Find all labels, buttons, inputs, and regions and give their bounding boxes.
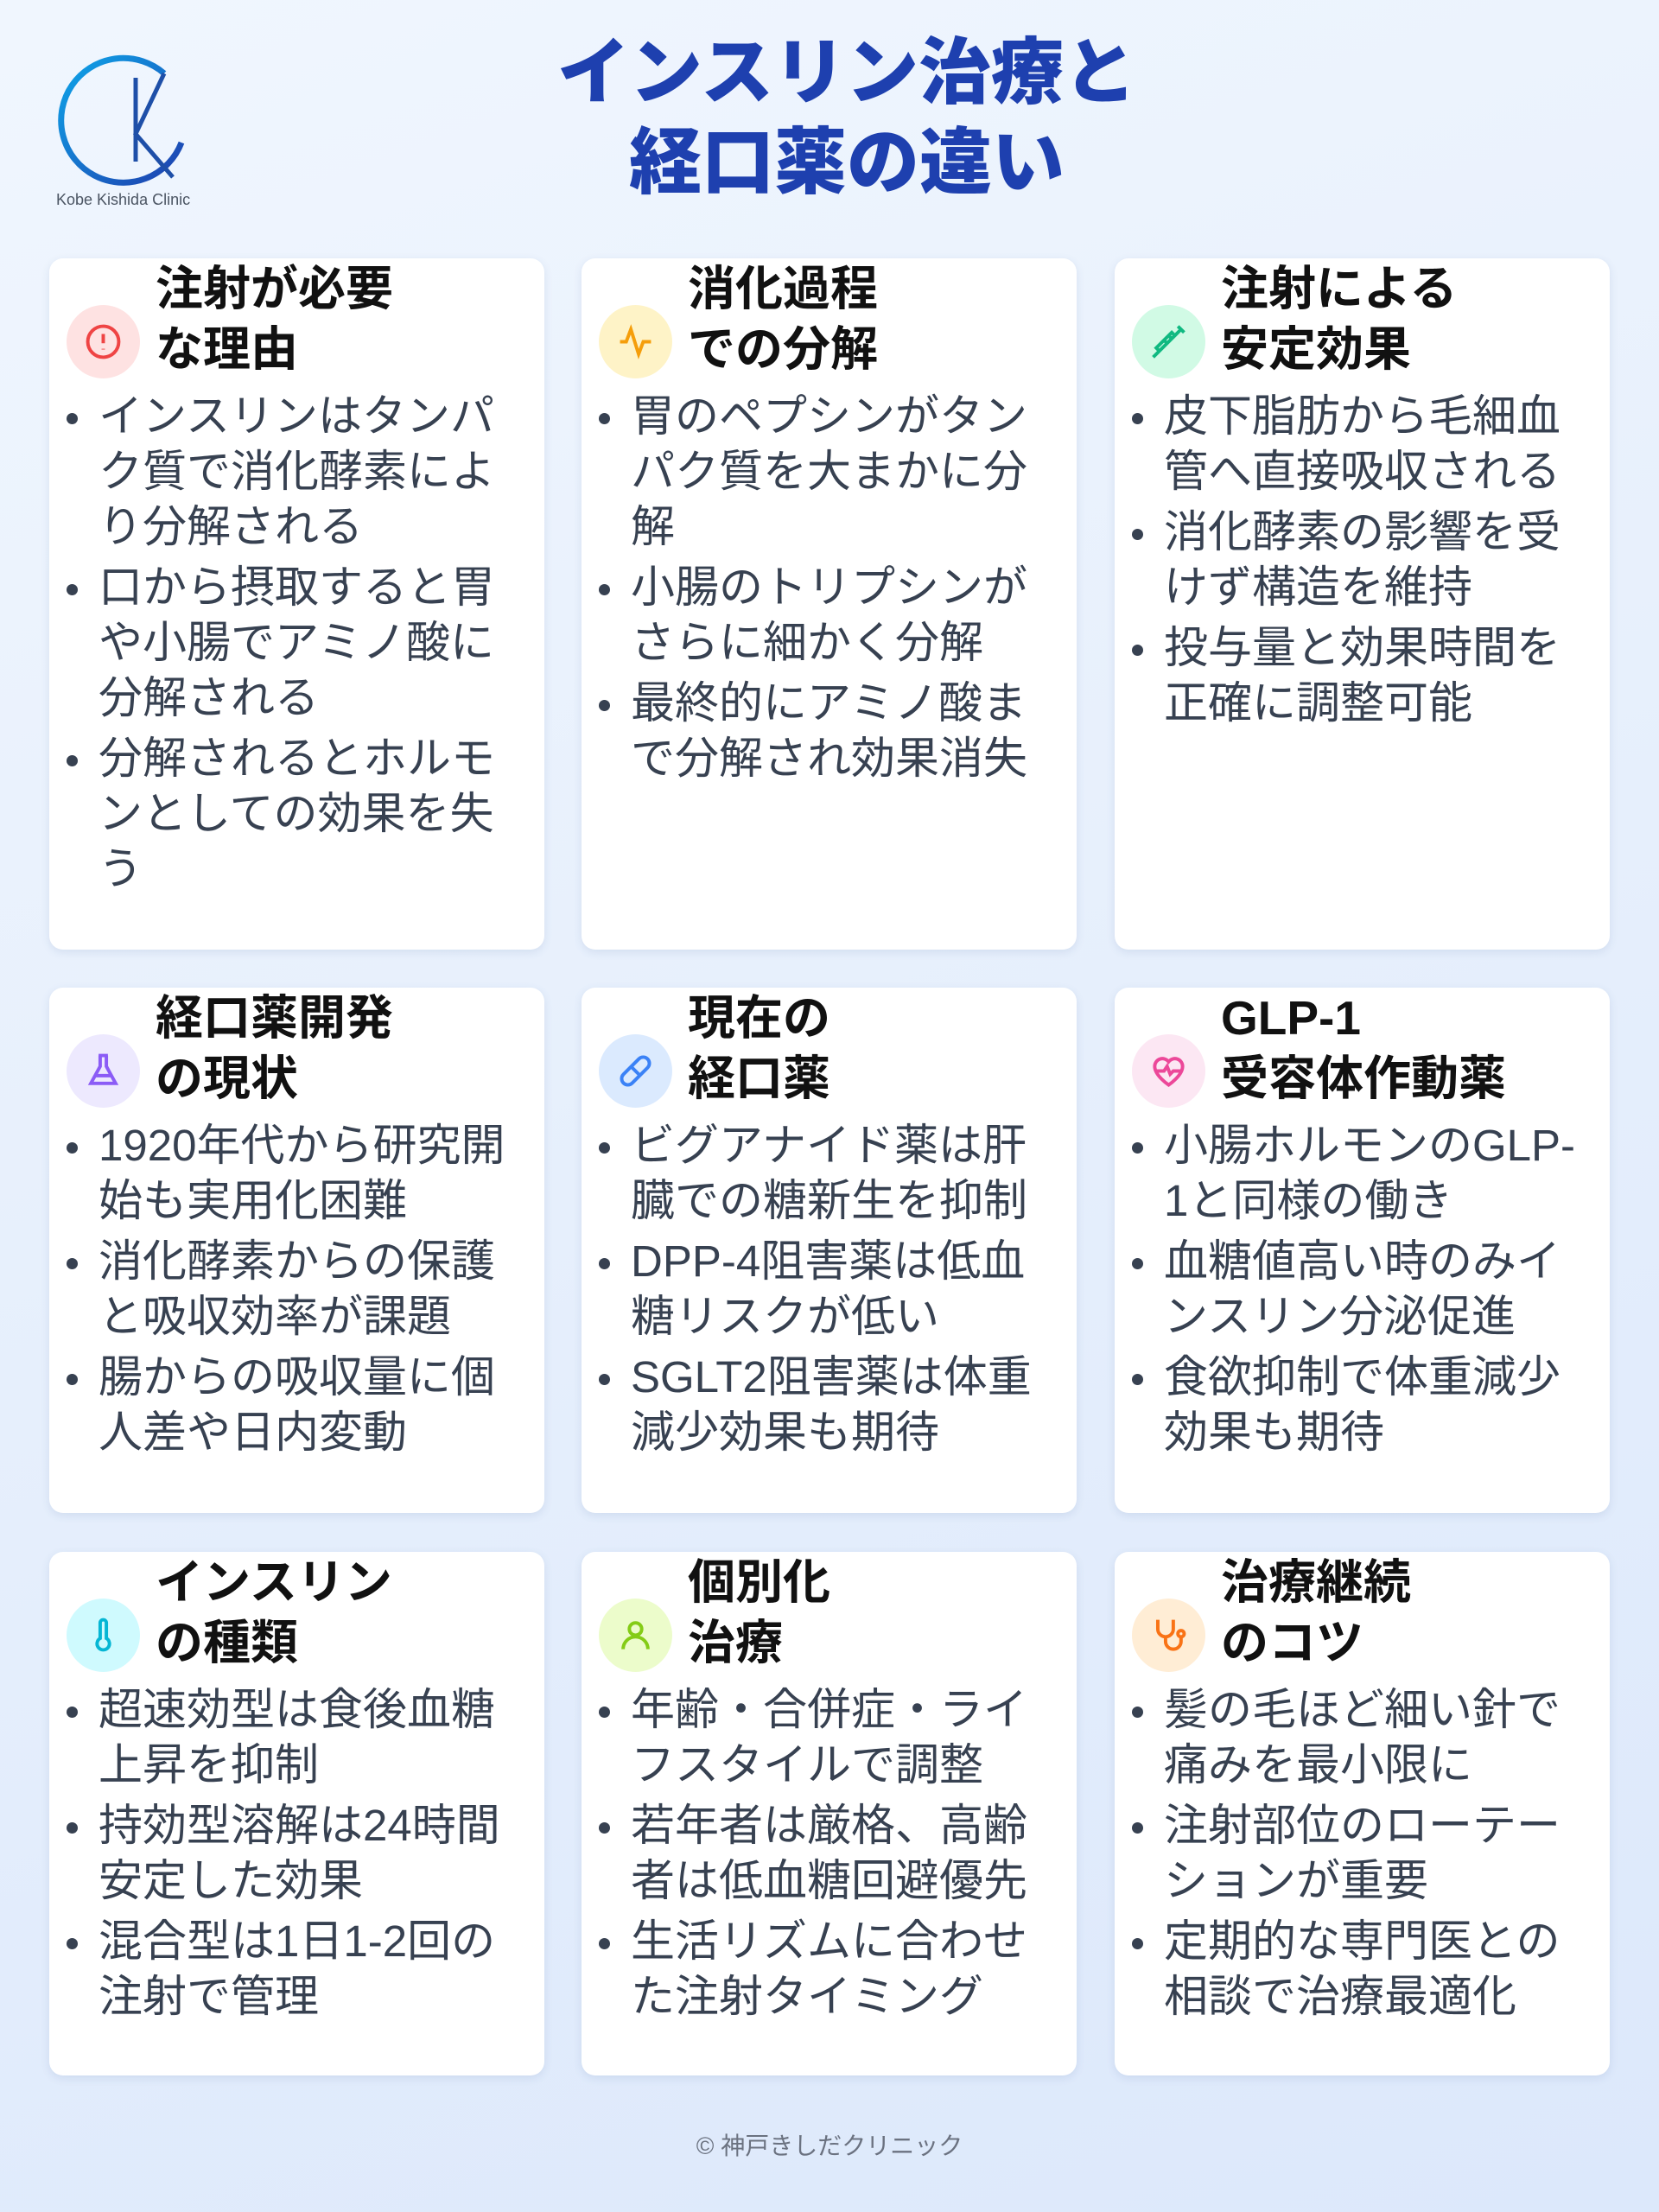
bullets: フスタイルで調整 [631, 1740, 983, 1789]
heading [1132, 1555, 1411, 1672]
bullets: 注射で管理 [99, 1972, 319, 2021]
bullets: 効果も期待 [1164, 1408, 1384, 1457]
bullets: で分解され効果消失 [631, 734, 1027, 783]
heading: 個別化 [688, 1555, 830, 1609]
bullets [599, 1121, 1032, 1457]
bullets [599, 391, 1027, 783]
panel: 経口薬開発の現状 [49, 988, 544, 1513]
bullets [599, 1685, 1027, 2021]
bullets: や小腸でアミノ酸に [99, 618, 494, 667]
heading [67, 262, 393, 378]
bullets: DPP-4阻害薬は低血 [631, 1236, 1025, 1286]
heading [67, 991, 393, 1108]
bullets: 分解される [99, 673, 319, 722]
bullets: インスリンはタンパ [99, 391, 494, 441]
bullets: 最終的にアミノ酸ま [631, 678, 1027, 728]
heading: での分解 [688, 322, 878, 376]
heading: 注射が必要 [156, 262, 393, 315]
bullets: 消化酵素からの保護 [99, 1236, 495, 1286]
bullets: けず構造を維持 [1164, 563, 1472, 612]
bullets: 胃のペプシンがタン [631, 391, 1027, 441]
heading: 治療継続 [1221, 1555, 1411, 1609]
bullets: ンスリン分泌促進 [1164, 1292, 1516, 1341]
bullets: 若年者は厳格、高齢 [631, 1801, 1027, 1850]
bullets: 臓での糖新生を抑制 [631, 1176, 1027, 1225]
heading [599, 262, 878, 378]
heading [599, 1555, 830, 1672]
bullets: SGLT2阻害薬は体重 [631, 1352, 1032, 1402]
bullets: 注射部位のローテー [1164, 1801, 1560, 1850]
heading: 経口薬開発 [156, 991, 393, 1045]
bullets: り分解される [99, 502, 363, 551]
bullets: 糖リスクが低い [631, 1292, 939, 1341]
bullets: 混合型は1日1-2回の [99, 1916, 495, 1966]
heading: 安定効果 [1221, 322, 1411, 376]
bullets: 管へ直接吸収される [1164, 447, 1560, 496]
title: 経口薬の違い [629, 122, 1065, 203]
heading: 消化過程 [688, 262, 878, 315]
panel: 注射による安定効果 [1115, 258, 1610, 950]
bullets [67, 391, 495, 893]
bullets: 始も実用化困難 [99, 1176, 407, 1225]
heading: インスリン [156, 1555, 392, 1609]
bullets: 1920年代から研究開 [99, 1121, 505, 1170]
panel: 治療継続のコツ [1115, 1552, 1610, 2075]
bullets: ク質で消化酵素によ [99, 447, 495, 496]
bullets: 生活リズムに合わせ [631, 1916, 1027, 1966]
bullets: 持効型溶解は24時間 [99, 1801, 500, 1850]
panel: GLP-1受容体作動薬 [1115, 988, 1610, 1513]
bullets: 消化酵素の影響を受 [1164, 507, 1560, 556]
bullets: 口から摂取すると胃 [99, 563, 495, 612]
bullets: 上昇を抑制 [99, 1740, 319, 1789]
heading: 経口薬 [688, 1052, 830, 1105]
bullets [1132, 391, 1560, 728]
heading: の現状 [156, 1052, 298, 1105]
bullets: 年齢・合併症・ライ [631, 1685, 1027, 1734]
bullets: 定期的な専門医との [1164, 1916, 1560, 1966]
bullets: 腸からの吸収量に個 [99, 1352, 495, 1402]
bullets [67, 1685, 500, 2021]
heading [1132, 262, 1457, 378]
bullets [1132, 1685, 1560, 2021]
title: インスリン治療と [557, 32, 1136, 113]
panel: 消化過程での分解 [582, 258, 1077, 950]
bullets [1132, 1121, 1575, 1457]
bullets: 痛みを最小限に [1164, 1740, 1472, 1789]
heading: のコツ [1221, 1616, 1363, 1669]
bullets: ションが重要 [1164, 1856, 1428, 1905]
title [557, 32, 1136, 203]
heading: 現在の [688, 991, 830, 1045]
bullets: 人差や日内変動 [99, 1408, 407, 1457]
heading: 注射による [1221, 262, 1457, 315]
heading [599, 991, 830, 1108]
heading: の種類 [156, 1616, 298, 1669]
bullets: 血糖値高い時のみイ [1164, 1236, 1560, 1286]
bullets: 食欲抑制で体重減少 [1164, 1352, 1560, 1402]
bullets: 減少効果も期待 [631, 1408, 939, 1457]
bullets: 超速効型は食後血糖 [99, 1685, 495, 1734]
bullets: 小腸のトリプシンが [631, 563, 1027, 612]
heading: 治療 [688, 1616, 783, 1669]
bullets: 者は低血糖回避優先 [631, 1856, 1027, 1905]
logo: Kobe Kishida Clinic [56, 191, 190, 208]
panel: インスリンの種類 [49, 1552, 544, 2075]
bullets: 分解されるとホルモ [99, 734, 495, 783]
heading: 受容体作動薬 [1221, 1052, 1506, 1105]
footer: © 神戸きしだクリニック [696, 2133, 963, 2159]
bullets: 皮下脂肪から毛細血 [1164, 391, 1560, 441]
panel: 個別化治療 [582, 1552, 1077, 2075]
bullets: 解 [631, 502, 675, 551]
bullets: さらに細かく分解 [631, 618, 983, 667]
heading: GLP-1 [1221, 991, 1361, 1045]
heading: な理由 [156, 322, 298, 376]
bullets: と吸収効率が課題 [99, 1292, 451, 1341]
bullets: 髪の毛ほど細い針で [1164, 1685, 1560, 1734]
bullets: パク質を大まかに分 [631, 447, 1027, 496]
bullets: 相談で治療最適化 [1164, 1972, 1516, 2021]
bullets: 正確に調整可能 [1164, 678, 1472, 728]
heading [1132, 991, 1506, 1108]
heading [67, 1555, 392, 1672]
logo [56, 55, 190, 208]
bullets: 投与量と効果時間を [1164, 623, 1560, 672]
bullets: 1と同様の働き [1164, 1176, 1452, 1225]
panel: 注射が必要な理由 [49, 258, 544, 950]
bullets: う [99, 844, 143, 893]
bullets: 安定した効果 [99, 1856, 363, 1905]
bullets: 小腸ホルモンのGLP- [1164, 1121, 1575, 1170]
bullets: た注射タイミング [631, 1972, 983, 2021]
bullets [67, 1121, 505, 1457]
panel: 現在の経口薬 [582, 988, 1077, 1513]
bullets: ビグアナイド薬は肝 [631, 1121, 1027, 1170]
bullets: ンとしての効果を失 [99, 789, 493, 838]
